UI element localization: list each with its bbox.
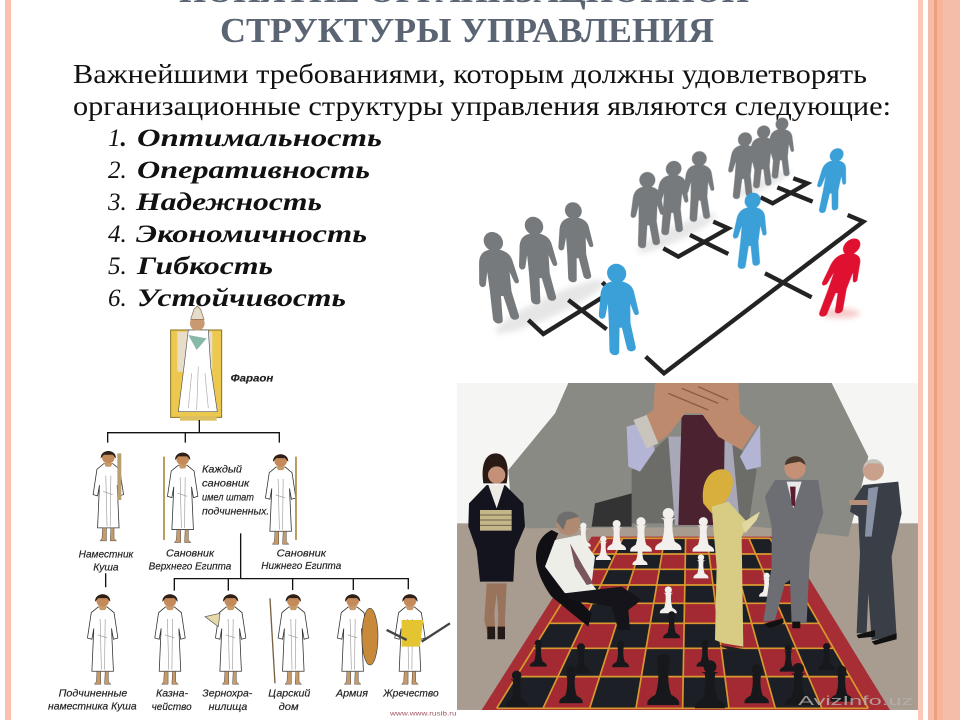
requirements list: Гибкость xyxy=(136,253,273,280)
older man checking watch xyxy=(848,459,902,645)
hierarchy labels: Верхнего Египта xyxy=(149,562,232,573)
hierarchy labels: подчиненных. xyxy=(202,506,269,517)
standing man in grey suit xyxy=(763,456,823,628)
requirements list: 6. xyxy=(108,285,127,312)
requirements list: 1. xyxy=(108,125,127,152)
giant executive suit xyxy=(508,383,868,537)
hierarchy labels: Куша xyxy=(93,562,119,573)
subordinates xyxy=(87,594,450,684)
requirements list: Оперативность xyxy=(137,157,370,184)
hierarchy labels: Нижнего Египта xyxy=(261,561,342,572)
requirements list: Устойчивость xyxy=(137,285,346,312)
requirements list: 5. xyxy=(108,253,127,280)
org chart illustration xyxy=(472,118,872,373)
pharaoh hierarchy illustration xyxy=(48,306,457,717)
hierarchy labels: Жречество xyxy=(382,689,439,700)
hierarchy labels: чейство xyxy=(152,702,192,713)
chess business photo xyxy=(457,383,918,710)
hierarchy labels xyxy=(48,373,439,713)
requirements list: Надежность xyxy=(135,189,322,216)
intro text: Важнейшими требованиями, которым должны удовлетворять xyxy=(73,59,867,89)
hierarchy labels: Наместник xyxy=(79,549,134,560)
hierarchy labels: Подчиненные xyxy=(59,689,128,700)
source watermark: www.www.rusib.ru xyxy=(389,711,457,717)
hierarchy labels: Зернохра- xyxy=(202,689,252,700)
hierarchy labels: дом xyxy=(279,702,299,713)
hierarchy labels: Казна- xyxy=(156,689,188,700)
white chess pieces xyxy=(576,508,795,613)
chess board xyxy=(482,537,890,710)
upper connector lines xyxy=(108,420,279,443)
requirements list: Экономичность xyxy=(136,221,367,248)
woman with books xyxy=(468,453,525,639)
dignitaries xyxy=(93,451,296,544)
hierarchy labels: сановник xyxy=(202,479,250,490)
hierarchy labels: Каждый xyxy=(202,464,243,475)
lower connector lines xyxy=(106,533,408,591)
hierarchy labels: Сановник xyxy=(166,549,214,560)
hierarchy labels: Сановник xyxy=(277,548,326,559)
red manager figure xyxy=(810,238,872,317)
left border band xyxy=(5,0,11,720)
photo watermark: AvizInfo.uz xyxy=(798,693,913,708)
requirements list: Оптимальность xyxy=(137,125,382,152)
woman in yellow xyxy=(703,469,760,652)
requirements list: 4. xyxy=(108,221,127,248)
hierarchy labels: Фараон xyxy=(231,373,273,384)
requirements list xyxy=(107,125,382,312)
hierarchy labels: нилища xyxy=(209,702,248,713)
hierarchy labels: наместника Куша xyxy=(48,702,137,713)
hierarchy labels: Армия xyxy=(335,689,368,700)
requirements list: 3. xyxy=(107,189,127,216)
pharaoh figure xyxy=(171,306,222,421)
title: СТРУКТУРЫ УПРАВЛЕНИЯ xyxy=(220,11,714,50)
right border bands xyxy=(918,0,960,720)
black chess pieces xyxy=(505,611,853,708)
intro text: организационные структуры управления являются следующие: xyxy=(73,91,891,121)
intro text xyxy=(73,59,891,121)
title xyxy=(179,0,749,50)
hierarchy labels: Царский xyxy=(268,689,311,700)
requirements list: 2. xyxy=(108,157,127,184)
hierarchy labels: имел штат xyxy=(202,492,254,503)
seated man on phone xyxy=(536,511,642,630)
